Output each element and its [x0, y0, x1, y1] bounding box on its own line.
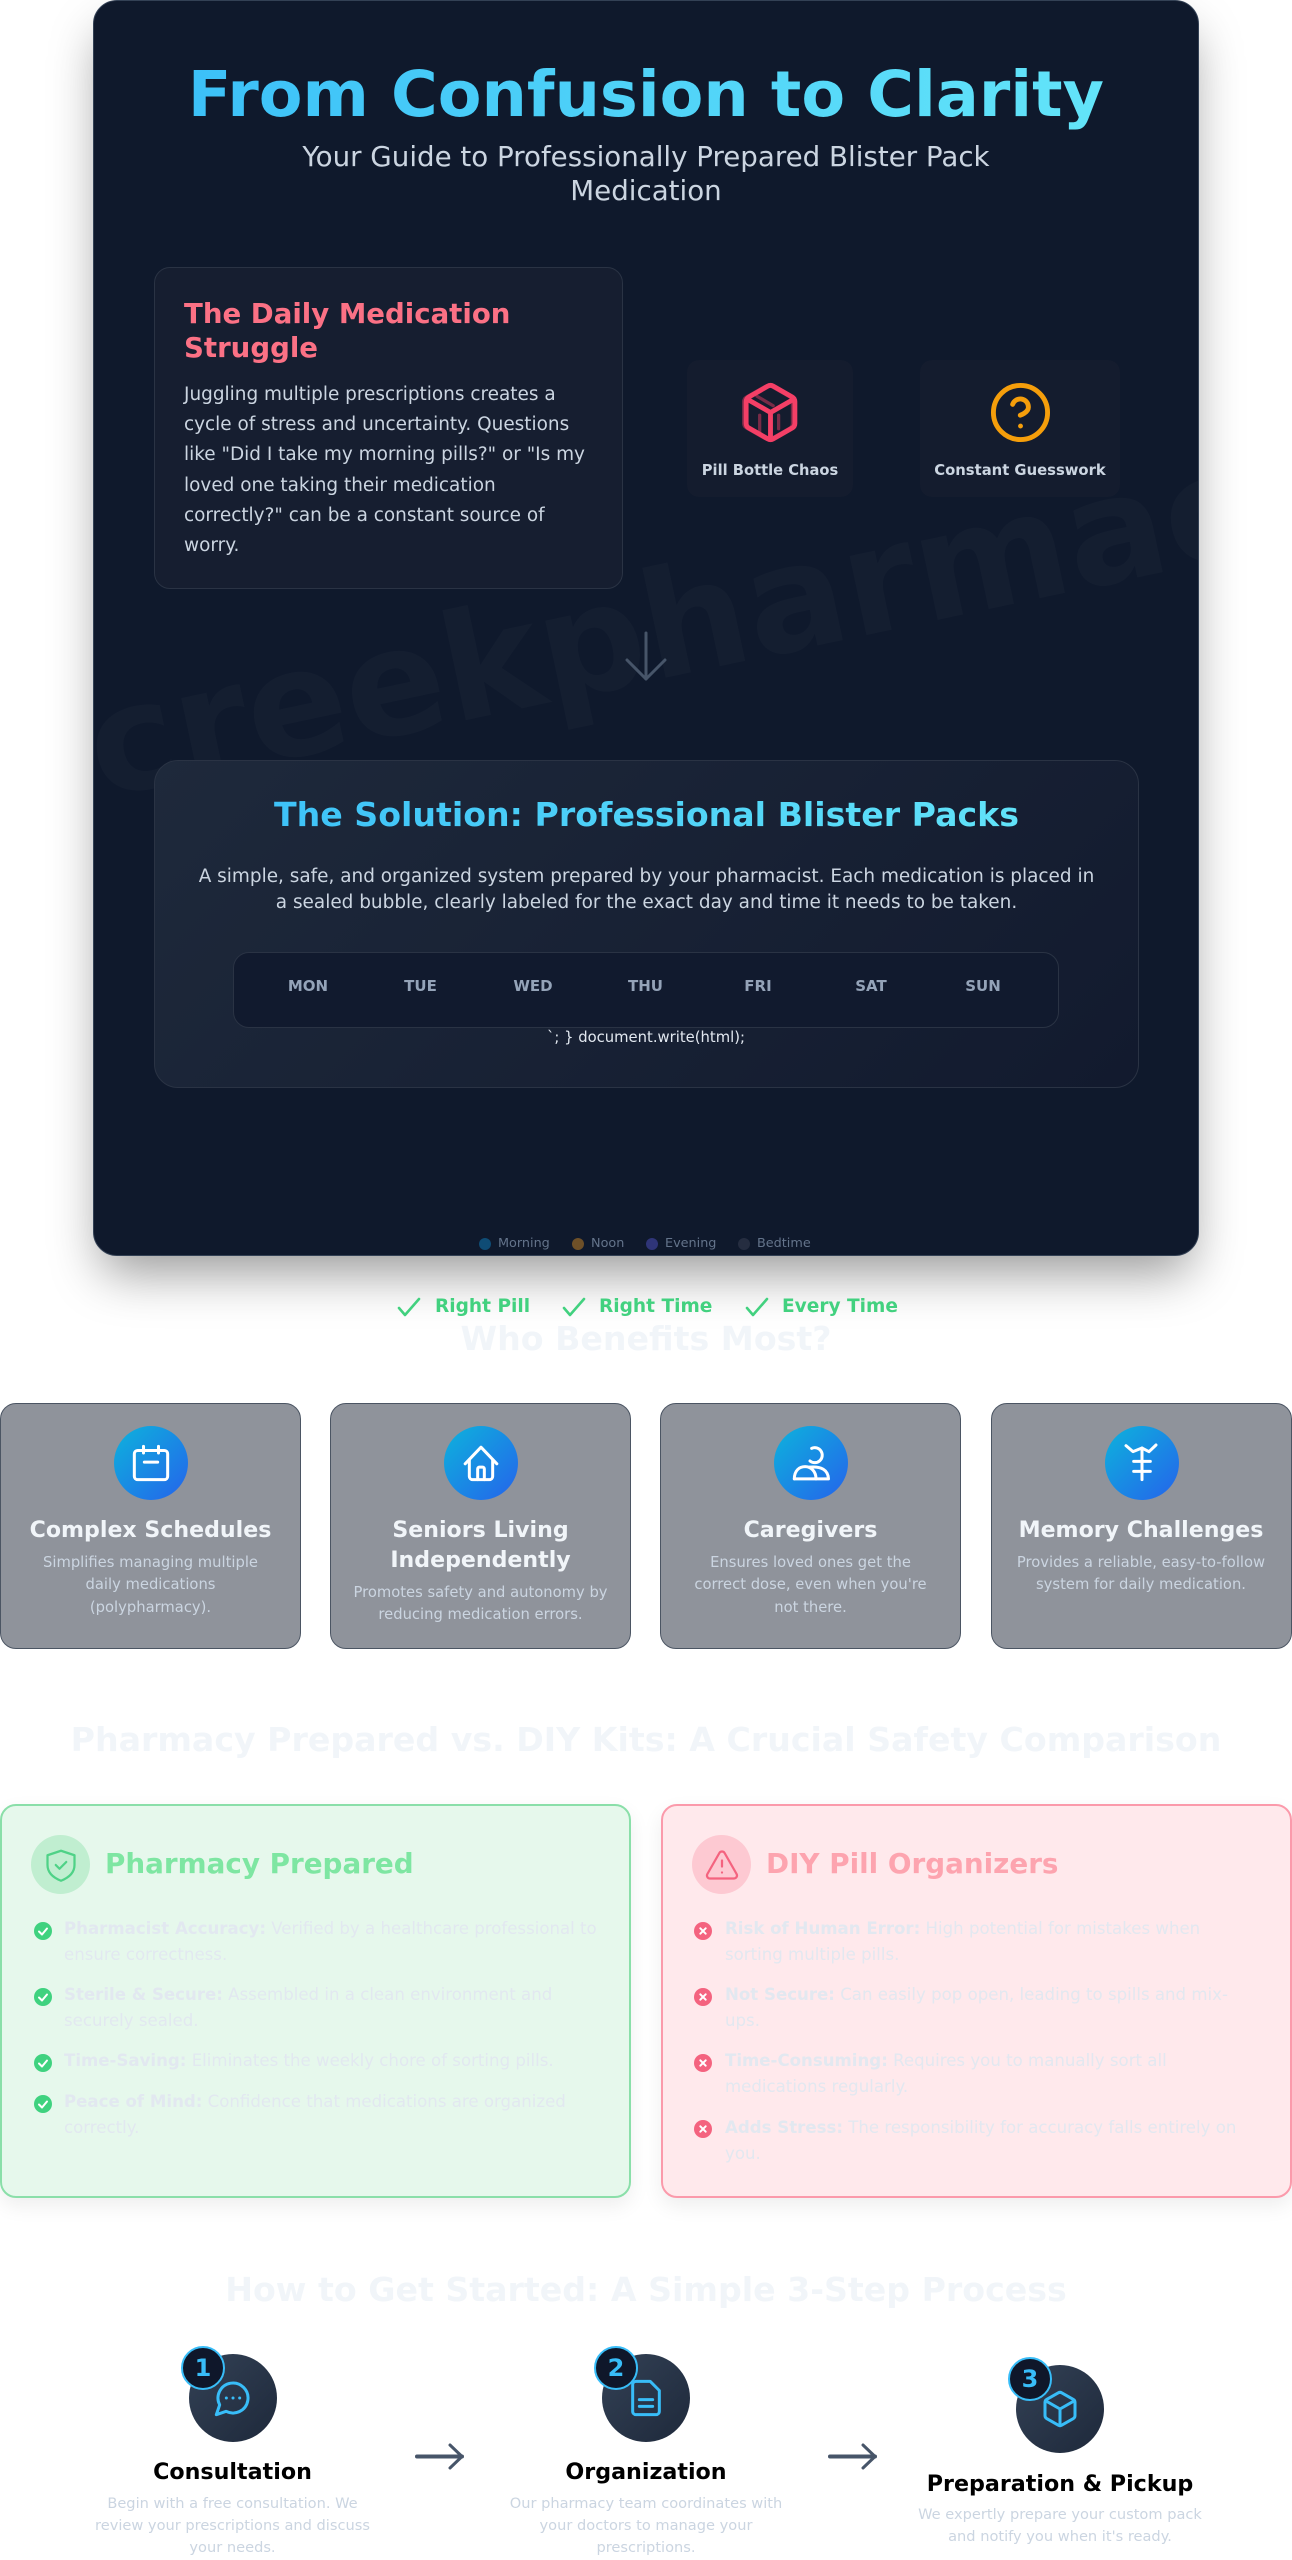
day: SUN: SUN — [965, 977, 1001, 995]
struggle body text: worry. — [184, 535, 239, 556]
legend label: Noon — [591, 1236, 624, 1251]
struggle body text: correctly?" can be a constant source of — [184, 505, 545, 526]
item: time consuming — [725, 2051, 1167, 2096]
panel title: Pharmacy Prepared — [105, 1847, 414, 1880]
item: not secure: ups. — [725, 2011, 760, 2030]
card text: Provides a reliable, easy-to-follow — [1017, 1554, 1265, 1571]
legend: bedtime — [738, 1238, 750, 1250]
day: WED: WED — [513, 977, 553, 995]
legend label: Bedtime — [757, 1236, 811, 1251]
item: human error — [725, 1919, 1200, 1964]
icon: step 3 circle — [1016, 2365, 1104, 2453]
legend label: Morning — [498, 1236, 550, 1251]
step 2 text: your doctors to manage your — [540, 2517, 752, 2534]
day: MON: MON — [288, 977, 328, 995]
card text: daily medications — [85, 1576, 216, 1593]
card text: Simplifies managing multiple — [43, 1554, 258, 1571]
item: sterile: securely sealed. — [64, 2011, 199, 2030]
item: peace of mind — [64, 2092, 566, 2137]
blister pack — [233, 952, 1059, 1028]
card title: Caregivers — [744, 1517, 877, 1543]
item: peace of mind: correctly. — [64, 2118, 139, 2137]
step 1 text: Begin with a free consultation. We — [107, 2495, 358, 2512]
label: Constant Guesswork — [934, 462, 1106, 479]
struggle heading — [184, 297, 510, 364]
step 2 text: prescriptions. — [596, 2539, 696, 2556]
step 1 badge: 1 — [195, 2354, 211, 2382]
heading: comparison: Pharmacy Prepared vs. DIY Kits: A Crucial Safety Comparison — [71, 1720, 1221, 1759]
card text: Ensures loved ones get the — [710, 1554, 911, 1571]
item: human error: sorting multiple pills. — [725, 1945, 899, 1964]
subtitle: Your Guide to Professionally Prepared Blister Pack — [302, 140, 990, 173]
card text — [43, 1554, 258, 1616]
icon: house — [444, 1426, 518, 1500]
panel: pharmacy prepared — [0, 1804, 631, 2198]
legend label: Evening — [665, 1236, 716, 1251]
struggle body text: cycle of stress and uncertainty. Questions — [184, 414, 569, 435]
card text: system for daily medication. — [1036, 1576, 1246, 1593]
cross: not secure — [694, 1988, 712, 2006]
check: sterile — [34, 1988, 52, 2006]
panel: constant guesswork — [920, 360, 1120, 497]
step 2 title: Organization — [565, 2459, 727, 2485]
day: SAT: SAT — [855, 977, 887, 995]
card title — [390, 1517, 571, 1573]
item: time saving: Time-Saving: Eliminates the weekly chore of sorting pills. — [64, 2051, 554, 2070]
arrow: 2 to 3 — [828, 2443, 877, 2470]
subtitle: Medication — [570, 174, 722, 207]
panel title: DIY Pill Organizers — [766, 1847, 1058, 1880]
card title: Seniors Living — [392, 1517, 569, 1543]
panel: memory — [990, 1403, 1292, 1649]
struggle body text — [183, 384, 585, 556]
right pill: Right Pill — [435, 1296, 530, 1317]
struggle body text: like "Did I take my morning pills?" or "Is my — [184, 444, 585, 465]
heading: steps: How to Get Started: A Simple 3-Step Process — [225, 2270, 1067, 2309]
item: pharmacist accuracy: ensure correctness. — [64, 1945, 227, 1964]
step 2 badge: 2 — [608, 2354, 624, 2382]
solution text: A simple, safe, and organized system prepared by your pharmacist. Each medication is placed in — [199, 866, 1094, 887]
every time: Every Time — [782, 1296, 898, 1317]
card text: Promotes safety and autonomy by — [353, 1584, 608, 1601]
item: not secure: Not Secure: Can easily pop open, leading to spills and mix- — [725, 1985, 1228, 2004]
day: FRI: FRI — [744, 977, 772, 995]
step 1 text: review your prescriptions and discuss — [95, 2517, 370, 2534]
step 2 text: Our pharmacy team coordinates with — [510, 2495, 782, 2512]
item: pharmacist accuracy — [64, 1919, 597, 1964]
panel: diy organizers — [661, 1804, 1292, 2198]
step 3 text — [918, 2506, 1202, 2545]
legend: morning — [479, 1238, 491, 1250]
arrow: down — [626, 632, 666, 680]
icon: caregiver — [774, 1426, 848, 1500]
icon: question — [991, 383, 1050, 442]
panel: caregivers — [660, 1403, 961, 1649]
solution heading — [155, 793, 1138, 837]
item: human error: Risk of Human Error: High potential for mistakes when — [725, 1919, 1200, 1938]
step 3 title: Preparation & Pickup — [927, 2470, 1193, 2496]
step 3 text: We expertly prepare your custom pack — [918, 2506, 1202, 2523]
step 1 title: Consultation — [153, 2459, 312, 2485]
card title: Memory Challenges — [1019, 1517, 1263, 1543]
title: From Confusion to Clarity — [188, 58, 1104, 132]
card title: Complex Schedules — [30, 1517, 271, 1543]
cross: adds stress — [694, 2120, 712, 2138]
card title: Independently — [390, 1547, 571, 1573]
panel: daily struggle — [154, 267, 623, 589]
step 2 text — [510, 2495, 782, 2556]
item: sterile: Sterile & Secure: Assembled in a clean environment and — [64, 1985, 552, 2004]
step 3 badge — [1008, 2357, 1052, 2401]
cross: human error — [694, 1922, 712, 1940]
struggle heading: Struggle — [184, 331, 318, 364]
icon: step 2 circle — [602, 2354, 690, 2442]
solution heading: The Solution: Professional Blister Packs — [274, 795, 1019, 834]
day: THU: THU — [628, 977, 663, 995]
item: time consuming: Time-Consuming: Requires you to manually sort all — [725, 2051, 1167, 2070]
check: pharmacist accuracy — [34, 1922, 52, 1940]
item: time consuming: medications regularly. — [725, 2077, 908, 2096]
panel: seniors — [330, 1403, 631, 1649]
step 2 badge — [594, 2346, 638, 2390]
solution text — [198, 866, 1094, 913]
card text: reducing medication errors. — [378, 1606, 583, 1623]
icon: check — [746, 1298, 768, 1316]
icon: calendar — [114, 1426, 188, 1500]
legend: evening — [646, 1238, 658, 1250]
item: pharmacist accuracy: Pharmacist Accuracy: Verified by a healthcare professional to — [64, 1919, 597, 1938]
step 1 badge — [181, 2346, 225, 2390]
icon: box — [742, 382, 798, 442]
label: Pill Bottle Chaos — [702, 462, 838, 479]
panel: hero card — [93, 0, 1199, 1256]
step 3 badge: 3 — [1022, 2365, 1038, 2393]
card text: not there. — [774, 1599, 847, 1616]
card text: (polypharmacy). — [90, 1599, 211, 1616]
card text: correct dose, even when you're — [694, 1576, 927, 1593]
legend: noon — [572, 1238, 584, 1250]
card text — [1017, 1554, 1265, 1593]
panel: solution — [154, 760, 1139, 1088]
struggle body text: loved one taking their medication — [184, 475, 496, 496]
card text — [353, 1584, 608, 1623]
cross: time consuming — [694, 2054, 712, 2072]
item: not secure — [725, 1985, 1228, 2030]
item: adds stress — [725, 2118, 1236, 2163]
panel: pill bottle chaos — [687, 360, 853, 497]
arrow: 1 to 2 — [415, 2443, 464, 2470]
struggle body text: Juggling multiple prescriptions creates a — [184, 384, 556, 405]
icon: check — [398, 1298, 420, 1316]
item: adds stress: you. — [725, 2144, 761, 2163]
card text — [694, 1554, 927, 1616]
item: sterile — [64, 1985, 552, 2030]
icon: step 1 circle — [188, 2354, 276, 2442]
item: adds stress: Adds Stress: The responsibility for accuracy falls entirely on — [725, 2118, 1236, 2137]
heading: who benefits: Who Benefits Most? — [460, 1319, 832, 1358]
panel: complex schedules — [0, 1403, 301, 1649]
step 1 text: your needs. — [189, 2539, 276, 2556]
step 3 text: and notify you when it's ready. — [948, 2528, 1172, 2545]
solution text: a sealed bubble, clearly labeled for the exact day and time it needs to be taken. — [276, 892, 1017, 913]
step 1 text — [95, 2495, 370, 2556]
item: peace of mind: Peace of Mind: Confidence that medications are organized — [64, 2092, 566, 2111]
icon: check — [562, 1298, 586, 1316]
right time: Right Time — [599, 1296, 712, 1317]
day: TUE: TUE — [404, 977, 437, 995]
struggle heading: The Daily Medication — [184, 297, 510, 330]
check: peace of mind — [34, 2095, 52, 2113]
subtitle — [302, 140, 990, 207]
icon: warning — [692, 1835, 751, 1894]
stray code text: `; } document.write(html); — [547, 1029, 745, 1046]
icon: memory — [1104, 1426, 1178, 1500]
icon: shield — [31, 1835, 90, 1894]
check: time saving — [34, 2054, 52, 2072]
